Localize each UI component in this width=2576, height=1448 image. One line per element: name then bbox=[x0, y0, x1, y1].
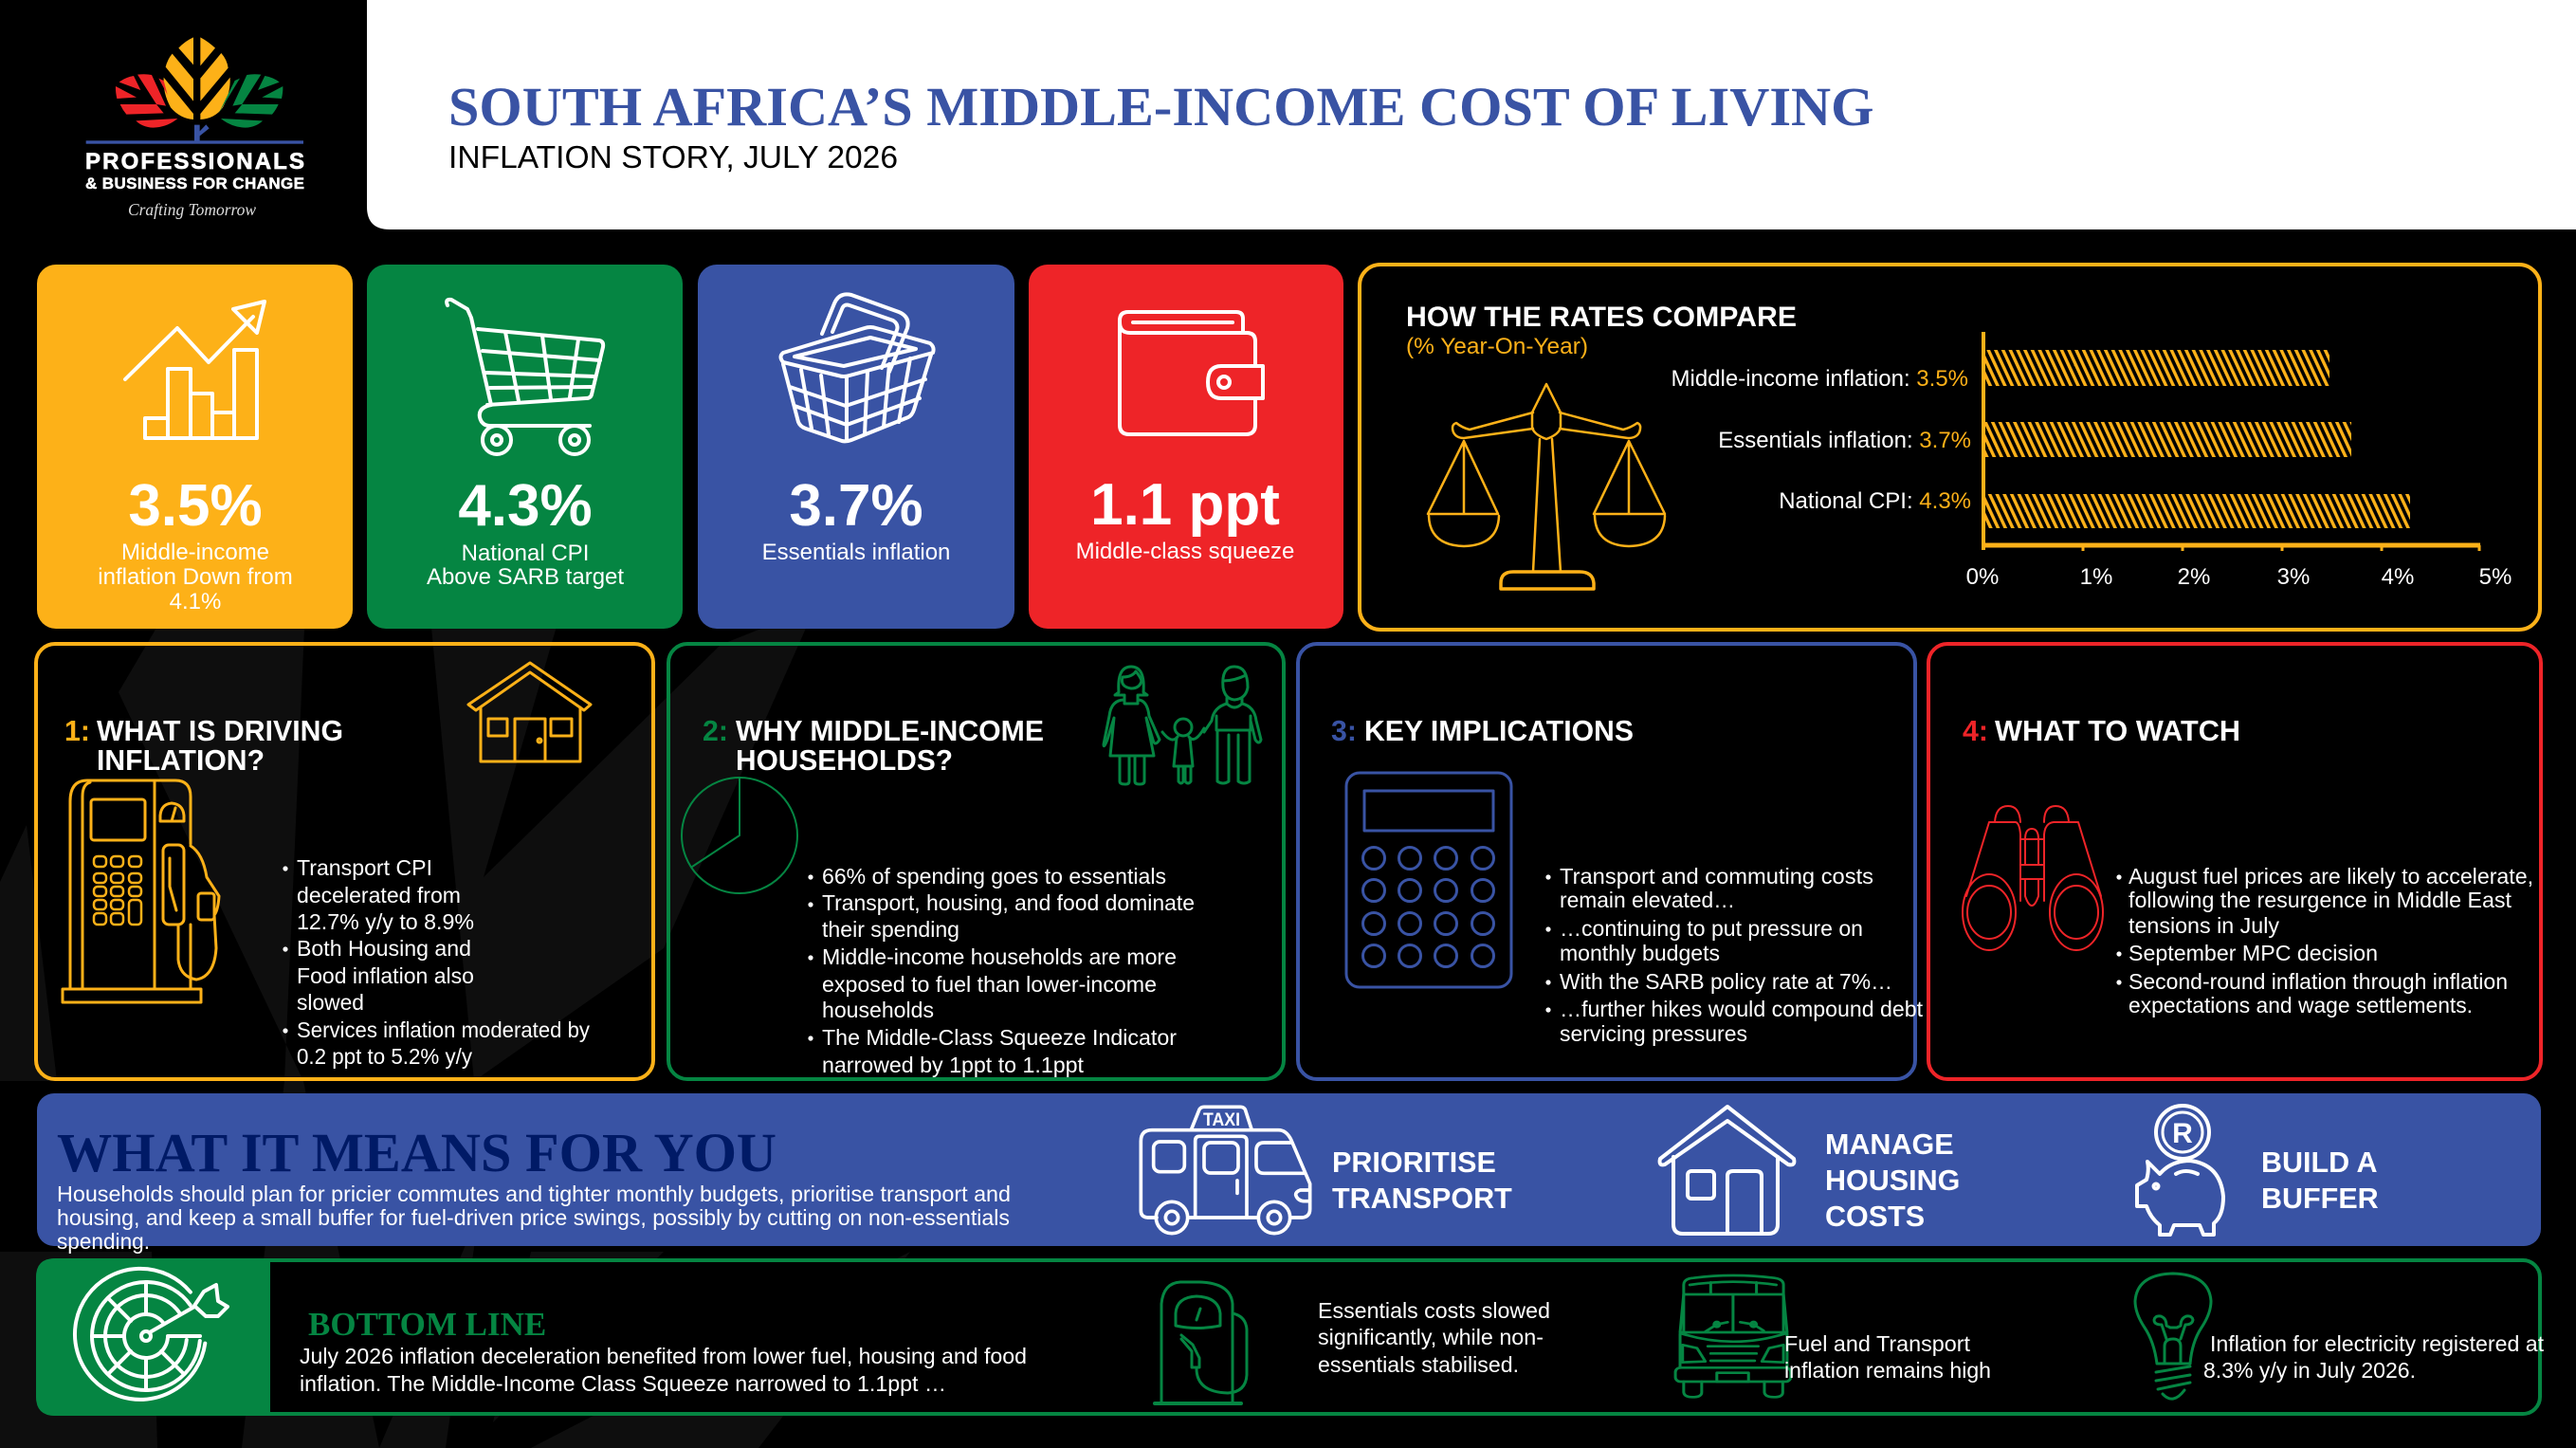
panel: KPI middle-income inflation: inflation Down from bbox=[98, 564, 293, 590]
text: drivers list: 12.7% y/y to 8.9% bbox=[297, 909, 474, 934]
panel: KPI national CPI: 4.3% bbox=[458, 473, 593, 539]
text: drivers list: 0.2 ppt to 5.2% y/y bbox=[297, 1044, 472, 1069]
text: households list: Middle-income households are more bbox=[822, 944, 1177, 969]
heading: BOTTOM LINE bbox=[308, 1306, 546, 1343]
icon: wallet bbox=[1120, 312, 1263, 434]
panel: key implications: KEY IMPLICATIONS bbox=[1364, 716, 1634, 747]
panel: KPI middle-class squeeze bbox=[1029, 265, 1343, 629]
text: implications list: …further hikes would compound debt bbox=[1560, 997, 1924, 1021]
text: essentials costs: essentials stabilised. bbox=[1318, 1352, 1519, 1377]
pie chart bbox=[682, 778, 797, 893]
heading: WHAT IT MEANS FOR YOU bbox=[57, 1122, 776, 1183]
subheading: (% Year-On-Year) bbox=[1406, 334, 1588, 359]
logo: & BUSINESS FOR CHANGE bbox=[85, 174, 304, 192]
text: households list: The Middle-Class Squeeze Indicator bbox=[822, 1025, 1177, 1050]
text: drivers list: Both Housing and bbox=[297, 936, 471, 961]
icon: house bbox=[1660, 1107, 1794, 1234]
logo bbox=[85, 37, 304, 219]
text: implications list: servicing pressures bbox=[1560, 1021, 1747, 1046]
text: implications list: …continuing to put pressure on bbox=[1560, 916, 1863, 941]
panel: KPI middle-income inflation bbox=[37, 265, 353, 629]
heading: 2: bbox=[703, 716, 728, 747]
bar chart: rates: 4% bbox=[2382, 564, 2414, 590]
panel: KPI middle-income inflation: 4.1% bbox=[170, 589, 221, 614]
label: prioritise transport: TRANSPORT bbox=[1332, 1182, 1512, 1215]
panel: why middle-income households: WHY MIDDLE-INCOME bbox=[736, 716, 1044, 747]
label: manage housing costs: MANAGE bbox=[1825, 1128, 1954, 1161]
text: households list: households bbox=[822, 998, 934, 1022]
label: manage housing costs bbox=[1825, 1128, 1960, 1233]
body text: July 2026 inflation deceleration benefited from lower fuel, housing and food bbox=[300, 1344, 1027, 1368]
panel: why middle-income households bbox=[668, 644, 1284, 1079]
icon: shopping cart bbox=[447, 300, 603, 454]
panel: KPI middle-class squeeze: Middle-class squeeze bbox=[1076, 539, 1294, 564]
body text: spending. bbox=[57, 1229, 150, 1254]
text: implications list: With the SARB policy rate at 7%… bbox=[1560, 969, 1892, 994]
text: implications list: remain elevated… bbox=[1560, 888, 1735, 912]
icon: binoculars bbox=[1963, 806, 2103, 950]
body text: Households should plan for pricier commutes and tighter monthly budgets, prioritise transport and bbox=[57, 1182, 1011, 1206]
icon: light bulb bbox=[2135, 1274, 2211, 1399]
panel: KPI middle-income inflation: 3.5% bbox=[128, 473, 263, 539]
panel: KPI middle-income inflation: Middle-income bbox=[121, 540, 269, 565]
text: essentials costs bbox=[1318, 1298, 1550, 1377]
panel: KPI national CPI: Above SARB target bbox=[427, 564, 624, 590]
text: drivers list bbox=[283, 855, 590, 1069]
label: prioritise transport bbox=[1332, 1146, 1512, 1215]
text: electricity inflation: Inflation for electricity registered at bbox=[2210, 1331, 2545, 1356]
text: essentials costs: significantly, while non- bbox=[1318, 1325, 1544, 1349]
text: fuel and transport: inflation remains high bbox=[1784, 1358, 1991, 1383]
text: implications list: monthly budgets bbox=[1560, 941, 1720, 965]
panel: KPI essentials inflation bbox=[698, 265, 1014, 629]
icon: target and dart bbox=[75, 1269, 228, 1400]
text: watch list: Second-round inflation through inflation bbox=[2128, 969, 2508, 994]
body text bbox=[57, 1182, 1011, 1254]
body text bbox=[300, 1344, 1027, 1396]
panel: KPI national CPI bbox=[367, 265, 683, 629]
icon: rising chart bbox=[125, 302, 265, 438]
text: fuel and transport: Fuel and Transport bbox=[1784, 1331, 1971, 1356]
panel: how the rates compare bbox=[1360, 265, 2540, 630]
icon: fuel pump bbox=[1155, 1282, 1247, 1403]
icon: coin and piggy bank: R bbox=[2172, 1118, 2193, 1149]
panel: what is driving inflation: INFLATION? bbox=[97, 745, 265, 777]
text: drivers list: decelerated from bbox=[297, 883, 461, 907]
text: watch list: September MPC decision bbox=[2128, 941, 2378, 965]
label: build a buffer: BUFFER bbox=[2261, 1182, 2379, 1215]
panel: KPI national CPI: National CPI bbox=[462, 541, 589, 566]
heading: 1: bbox=[64, 716, 90, 747]
panel: what is driving inflation bbox=[36, 644, 653, 1079]
icon: shopping basket bbox=[781, 294, 934, 441]
text: watch list bbox=[2116, 864, 2533, 1017]
bar chart: rates: 5% bbox=[2479, 564, 2512, 590]
panel: KPI middle-class squeeze: 1.1 ppt bbox=[1090, 472, 1280, 538]
label: build a buffer: BUILD A bbox=[2261, 1146, 2378, 1179]
label: manage housing costs: COSTS bbox=[1825, 1201, 1925, 1233]
logo: PROFESSIONALS bbox=[85, 149, 304, 174]
panel: what it means for you: TAXI bbox=[1203, 1110, 1240, 1130]
label: prioritise transport: PRIORITISE bbox=[1332, 1146, 1496, 1179]
panel: KPI essentials inflation: 3.7% bbox=[789, 473, 923, 539]
bar chart: rates: Middle-income inflation: 3.5% bbox=[1671, 366, 1968, 392]
label: build a buffer bbox=[2261, 1146, 2379, 1215]
icon: fuel pump bbox=[63, 780, 219, 1002]
body text: housing, and keep a small buffer for fuel-driven price swings, possibly by cutting on non-essentials bbox=[57, 1205, 1010, 1230]
bar chart: rates: 2% bbox=[2178, 564, 2210, 590]
heading: 4: bbox=[1963, 716, 1988, 747]
label: manage housing costs: HOUSING bbox=[1825, 1164, 1960, 1197]
panel: why middle-income households: HOUSEHOLDS? bbox=[736, 745, 953, 777]
icon: house bbox=[468, 663, 591, 761]
icon: taxi bbox=[1141, 1107, 1310, 1234]
panel: bottom line bbox=[36, 1258, 2545, 1416]
header banner bbox=[367, 0, 2576, 229]
text: watch list: August fuel prices are likely to accelerate, bbox=[2128, 864, 2533, 889]
text: watch list: expectations and wage settlements. bbox=[2128, 993, 2473, 1017]
text: fuel and transport bbox=[1784, 1331, 1991, 1383]
panel: what it means for you bbox=[37, 1093, 2541, 1254]
panel: key implications bbox=[1298, 644, 1924, 1079]
icon: bus bbox=[1675, 1275, 1791, 1397]
bar chart: rates: Essentials inflation: 3.7% bbox=[1718, 428, 1971, 453]
text: households list: exposed to fuel than lower-income bbox=[822, 972, 1157, 997]
bar chart: rates: 1% bbox=[2080, 564, 2112, 590]
icon: calculator bbox=[1346, 773, 1511, 987]
icon: family bbox=[1104, 667, 1261, 784]
panel: what to watch bbox=[1928, 644, 2541, 1079]
text: households list: narrowed by 1ppt to 1.1ppt bbox=[822, 1053, 1085, 1077]
text: drivers list: Services inflation moderated by bbox=[297, 1017, 590, 1042]
bar chart: rates: 0% bbox=[1966, 564, 1999, 590]
logo: Crafting Tomorrow bbox=[128, 200, 256, 219]
text: watch list: following the resurgence in Middle East bbox=[2128, 888, 2512, 912]
panel: what to watch: WHAT TO WATCH bbox=[1995, 716, 2240, 747]
text: essentials costs: Essentials costs slowed bbox=[1318, 1298, 1550, 1323]
heading: 3: bbox=[1331, 716, 1357, 747]
panel: KPI essentials inflation: Essentials inflation bbox=[762, 540, 950, 565]
icon: coin and piggy bank bbox=[2137, 1106, 2223, 1235]
subtitle: INFLATION STORY, JULY 2026 bbox=[448, 140, 898, 175]
text: households list: 66% of spending goes to essentials bbox=[822, 864, 1166, 889]
text: drivers list: Food inflation also bbox=[297, 963, 474, 988]
icon: balance scales bbox=[1428, 384, 1665, 589]
text: households list: their spending bbox=[822, 917, 959, 942]
text: households list: Transport, housing, and food dominate bbox=[822, 890, 1195, 915]
text: implications list: Transport and commuting costs bbox=[1560, 864, 1873, 889]
panel: what is driving inflation: WHAT IS DRIVING bbox=[97, 716, 343, 747]
text: watch list: tensions in July bbox=[2128, 913, 2280, 938]
body text: inflation. The Middle-Income Class Squeeze narrowed to 1.1ppt … bbox=[300, 1371, 946, 1396]
text: households list bbox=[808, 864, 1195, 1077]
bar chart: rates bbox=[1671, 332, 2512, 590]
title: SOUTH AFRICA’S MIDDLE-INCOME COST OF LIVING bbox=[448, 76, 1873, 137]
text: electricity inflation: 8.3% y/y in July 2026. bbox=[2203, 1358, 2416, 1383]
bar chart: rates: 3% bbox=[2277, 564, 2310, 590]
text: electricity inflation bbox=[2203, 1331, 2545, 1383]
text: drivers list: slowed bbox=[297, 990, 364, 1015]
text: implications list bbox=[1545, 864, 1924, 1046]
text: drivers list: Transport CPI bbox=[297, 855, 432, 880]
bar chart: rates: National CPI: 4.3% bbox=[1779, 488, 1971, 514]
heading: HOW THE RATES COMPARE bbox=[1406, 302, 1797, 333]
